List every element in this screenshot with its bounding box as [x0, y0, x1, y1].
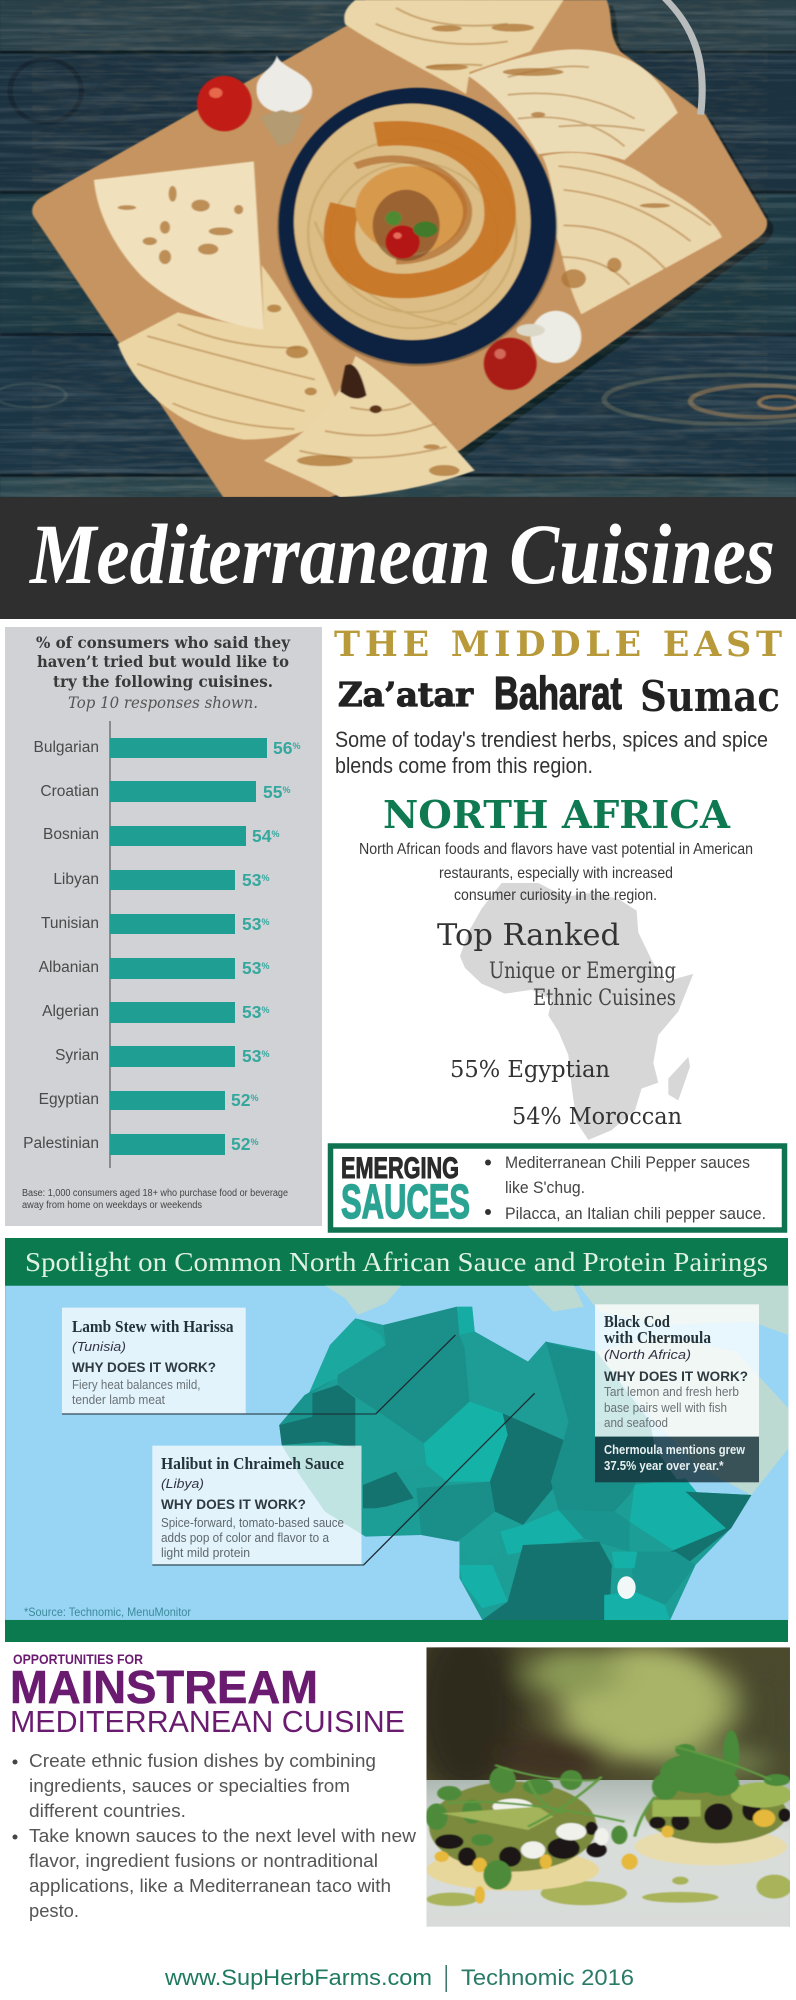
tomatoes and garlic — [197, 55, 581, 390]
spice names — [338, 667, 780, 721]
opportunities heading — [10, 1651, 405, 1739]
opportunities bullets: pesto. — [29, 1901, 79, 1921]
emerging sauces heading — [341, 1152, 470, 1229]
black cod text: Chermoula mentions grew — [604, 1443, 745, 1457]
bar chart: 56 — [273, 738, 292, 758]
sauces list — [485, 1153, 766, 1223]
panel: north africa — [359, 792, 753, 1140]
black cod text: WHY DOES IT WORK? — [604, 1368, 748, 1384]
north africa description: restaurants, especially with increased — [439, 865, 673, 882]
sauces list: Mediterranean Chili Pepper sauces — [505, 1153, 750, 1172]
opportunities heading: MEDITERRANEAN CUISINE — [10, 1704, 405, 1739]
bar chart: % — [250, 1137, 258, 1147]
chart heading: Top 10 responses shown. — [68, 693, 258, 712]
opportunities bullets: ingredients, sauces or specialties from — [29, 1776, 350, 1796]
bar chart: Libyan — [53, 871, 99, 888]
footer — [164, 1965, 634, 1992]
bar chart: 53 — [242, 1002, 261, 1022]
heading: north africa: NORTH AFRICA — [383, 792, 731, 837]
black cod text — [604, 1312, 748, 1473]
bar chart: Syrian — [55, 1047, 99, 1064]
cutting board — [32, 0, 767, 497]
bar chart: Albanian — [39, 959, 99, 976]
north africa description — [359, 841, 753, 904]
callout: chermoula stat box — [595, 1437, 759, 1482]
spice names: Baharat — [494, 667, 622, 719]
lamb stew text: WHY DOES IT WORK? — [72, 1359, 216, 1375]
top ranked text: 55% Egyptian — [450, 1057, 610, 1083]
bar chart: 54 — [252, 826, 271, 846]
panel: emerging sauces — [330, 1146, 784, 1230]
middle east description: blends come from this region. — [335, 753, 593, 778]
halibut text: WHY DOES IT WORK? — [161, 1496, 306, 1512]
right taco filling — [645, 1783, 787, 1843]
halibut text: Halibut in Chraimeh Sauce — [161, 1454, 344, 1473]
bar chart: Bulgarian — [34, 739, 99, 756]
spice names: Sumac — [640, 672, 780, 721]
left taco filling — [429, 1782, 597, 1872]
base note — [22, 1188, 288, 1211]
pita wedges — [94, 0, 722, 497]
middle east description — [335, 727, 768, 778]
lamb stew text: Lamb Stew with Harissa — [72, 1317, 234, 1336]
lamb stew text: (Tunisia) — [72, 1339, 126, 1354]
bar chart: % — [292, 741, 300, 751]
map of africa — [5, 1286, 788, 1620]
opportunities heading: MAINSTREAM — [10, 1661, 318, 1713]
bar chart: % — [261, 917, 269, 927]
halibut text: (Libya) — [161, 1476, 204, 1491]
opportunities bullets: different countries. — [29, 1801, 186, 1821]
black cod text: and seafood — [604, 1416, 668, 1430]
bowl with hummus — [277, 88, 557, 366]
spotlight heading: Spotlight on Common North African Sauce and Protein Pairings — [25, 1247, 768, 1277]
emerging sauces heading: SAUCES — [341, 1176, 470, 1229]
chart heading: try the following cuisines. — [53, 672, 273, 691]
black cod text: (North Africa) — [604, 1347, 691, 1362]
title band — [0, 497, 796, 619]
black cod text: Black Cod — [604, 1312, 670, 1331]
lamb stew text: Fiery heat balances mild, — [72, 1378, 200, 1392]
chart heading — [36, 633, 291, 712]
black cod text: 37.5% year over year.* — [604, 1459, 724, 1473]
black cod text: Tart lemon and fresh herb — [604, 1385, 739, 1399]
halibut text: Spice-forward, tomato-based sauce — [161, 1516, 344, 1530]
header photo: hummus bowl on wooden board — [0, 0, 796, 503]
halibut text: light mild protein — [161, 1546, 250, 1560]
opportunities bullets: Take known sauces to the next level with new — [29, 1826, 417, 1846]
wood planks — [0, 0, 796, 503]
opportunities heading: OPPORTUNITIES FOR — [13, 1651, 143, 1667]
opportunities bullets: applications, like a Mediterranean taco with — [29, 1876, 391, 1896]
bar chart: % — [271, 829, 279, 839]
bar chart: Palestinian — [23, 1135, 99, 1152]
bar chart: % — [261, 1049, 269, 1059]
north africa description: North African foods and flavors have vast potential in American — [359, 841, 753, 858]
bar chart: Bosnian — [43, 826, 99, 843]
africa silhouette — [460, 883, 693, 1140]
footer: www.SupHerbFarms.com — [164, 1965, 432, 1990]
bar chart: 53 — [242, 870, 261, 890]
bar chart: Algerian — [42, 1003, 99, 1020]
lamb stew text: tender lamb meat — [72, 1393, 165, 1407]
metal handle — [663, 0, 702, 115]
footer: Technomic 2016 — [461, 1965, 634, 1990]
base note: Base: 1,000 consumers aged 18+ who purchase food or beverage — [22, 1188, 288, 1199]
panel: spotlight map — [5, 1238, 788, 1642]
lamb stew text — [72, 1317, 234, 1407]
bar chart: Egyptian — [39, 1091, 99, 1108]
black cod text: with Chermoula — [604, 1328, 711, 1347]
source note: *Source: Technomic, MenuMonitor — [24, 1605, 191, 1619]
callout: halibut box — [152, 1446, 361, 1564]
bar chart — [23, 721, 300, 1168]
bar chart: Croatian — [40, 783, 99, 800]
heading: the middle east: THE MIDDLE EAST — [334, 624, 782, 665]
bar chart: 53 — [242, 958, 261, 978]
bar chart: 53 — [242, 914, 261, 934]
base note: away from home on weekdays or weekends — [22, 1200, 202, 1211]
top ranked text — [437, 918, 682, 1130]
halibut text: adds pop of color and flavor to a — [161, 1531, 329, 1545]
north africa description: consumer curiosity in the region. — [454, 887, 657, 904]
bar chart: 52 — [231, 1134, 250, 1154]
bar chart: % — [250, 1093, 258, 1103]
emerging sauces heading: EMERGING — [341, 1152, 459, 1185]
callout: lamb stew box — [62, 1308, 246, 1413]
top ranked text: 54% Moroccan — [512, 1104, 682, 1130]
black cod text: base pairs well with fish — [604, 1401, 727, 1415]
halibut text — [161, 1454, 344, 1560]
bar chart: % — [261, 961, 269, 971]
food photo: mediterranean tacos — [426, 1647, 790, 1927]
leader lines — [62, 1335, 535, 1565]
chart heading: % of consumers who said they — [36, 633, 291, 652]
bar chart: 55 — [263, 782, 282, 802]
bar chart: Tunisian — [41, 915, 99, 932]
sauces list: Pilacca, an Italian chili pepper sauce. — [505, 1204, 766, 1223]
bar chart: % — [282, 785, 290, 795]
top ranked text: Unique or Emerging — [489, 959, 676, 984]
panel: the middle east — [334, 624, 782, 778]
sauces list: like S'chug. — [505, 1178, 585, 1197]
plate sauce — [426, 1875, 792, 1906]
opportunities bullets: flavor, ingredient fusions or nontraditional — [29, 1851, 378, 1871]
bar chart: 53 — [242, 1046, 261, 1066]
chart heading: haven’t tried but would like to — [37, 652, 289, 671]
opportunities bullets — [12, 1751, 417, 1921]
bar chart: 52 — [231, 1090, 250, 1110]
callout: black cod box — [595, 1304, 759, 1437]
bar chart: % — [261, 1005, 269, 1015]
spice names: Za’atar — [338, 675, 474, 714]
panel: opportunities — [10, 1620, 796, 1927]
panel: consumer interest bar chart — [5, 627, 322, 1226]
top ranked text: Top Ranked — [437, 918, 620, 953]
opportunities bullets: Create ethnic fusion dishes by combining — [29, 1751, 376, 1771]
top ranked text: Ethnic Cuisines — [533, 986, 676, 1011]
bar chart: % — [261, 873, 269, 883]
